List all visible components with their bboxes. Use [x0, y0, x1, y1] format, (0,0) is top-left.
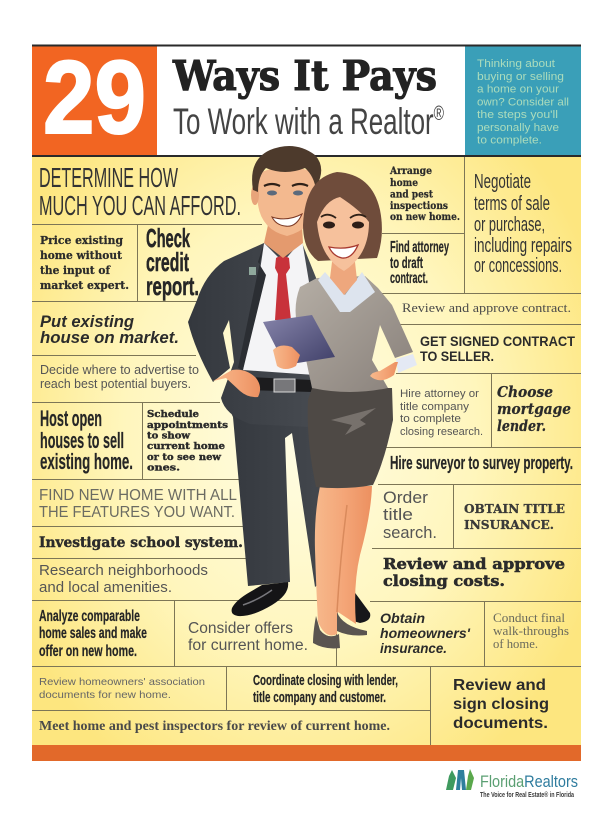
- step: negotiate terms: or concessions.: [474, 255, 562, 277]
- woman face: [317, 197, 369, 271]
- step: hire attorney or title company: title company: [400, 401, 470, 413]
- step: review closing costs: Review and approve: [383, 556, 565, 573]
- step: coordinate closing: title company and customer.: [253, 689, 386, 706]
- man hand: [213, 370, 260, 397]
- woman sleeve cuff: [396, 354, 417, 373]
- panel: teal intro: [465, 46, 581, 156]
- step: host open houses: Host open: [40, 406, 102, 431]
- step: find new home: THE FEATURES YOU WANT.: [39, 504, 235, 521]
- step: review and sign closing documents: documents.: [453, 715, 548, 732]
- tagline: The Voice for Real Estate® in Florida: [480, 791, 574, 799]
- step: check credit report: report.: [146, 271, 199, 301]
- step: schedule appointments: to show: [147, 430, 191, 442]
- step: consider offers: Consider offers: [188, 620, 293, 637]
- step: review homeowners association: Review homeowners' association: [39, 676, 205, 688]
- step: order title search: Order: [383, 488, 428, 507]
- step: find new home: [39, 487, 237, 521]
- panel: orange number block: [32, 40, 157, 156]
- step: schedule appointments: or to see new: [147, 452, 222, 463]
- man face: [256, 166, 318, 236]
- step: schedule appointments: appointments: [147, 420, 228, 431]
- step: decide where to advertise: reach best potential buyers.: [40, 376, 191, 391]
- step: host open houses: existing home.: [40, 449, 133, 474]
- step: find attorney: to draft: [390, 255, 423, 272]
- panel: teal intro: Thinking about: [477, 58, 555, 70]
- step: hire attorney or title company: to complete: [400, 413, 461, 425]
- step: price existing home: the input of: [40, 263, 111, 277]
- step: price existing home: home without: [40, 248, 123, 262]
- step: negotiate terms: Negotiate: [474, 171, 531, 193]
- step: negotiate terms: or purchase,: [474, 214, 545, 236]
- step: get signed contract: TO SELLER.: [420, 349, 494, 364]
- step: obtain homeowners insurance: insurance.: [380, 641, 447, 656]
- step: host open houses: [40, 406, 133, 474]
- title: To Work with a Realtor: [173, 101, 544, 142]
- step: research neighborhoods: and local amenities.: [39, 579, 172, 596]
- step: arrange inspections: inspections: [390, 200, 448, 212]
- man trousers: [224, 398, 355, 592]
- step: arrange inspections: and pest: [390, 188, 433, 200]
- step: price existing home: Price existing: [40, 233, 123, 247]
- step: review homeowners association: [39, 676, 205, 701]
- man lapel shading: [238, 243, 266, 370]
- step: hire attorney or title company: Hire attorney or: [400, 388, 479, 400]
- woman hand holding folder: [273, 346, 300, 369]
- woman rear shoe: [337, 612, 367, 636]
- step: find attorney: contract.: [390, 270, 428, 287]
- woman smile: [329, 245, 358, 258]
- woman shoes: [313, 616, 340, 648]
- step: find attorney: [390, 239, 449, 287]
- folder: [263, 315, 335, 365]
- step: investigate school system: Investigate school system.: [39, 535, 243, 551]
- step: choose mortgage lender: lender.: [497, 417, 546, 435]
- panel: teal intro: the steps you'll: [477, 109, 558, 121]
- step: decide where to advertise: Decide where to advertise to: [40, 362, 199, 377]
- woman neck: [330, 262, 357, 295]
- step: analyze comparable home sales: offer on new home.: [39, 643, 137, 660]
- step: get signed contract: [420, 334, 576, 364]
- step: arrange inspections: home: [390, 177, 418, 189]
- man smile: [272, 214, 302, 226]
- step: review closing costs: closing costs.: [383, 573, 505, 590]
- step: choose mortgage lender: mortgage: [497, 400, 571, 418]
- panel: yellow steps area: [32, 156, 581, 746]
- man ears: [251, 185, 259, 205]
- step: find attorney: Find attorney: [390, 239, 449, 256]
- footer orange bar: [32, 745, 581, 761]
- step: review closing costs: [383, 556, 565, 590]
- step: research neighborhoods: [39, 562, 208, 596]
- step: choose mortgage lender: [497, 383, 571, 435]
- woman jacket: [296, 276, 413, 392]
- illustration: realtor woman: [263, 172, 417, 648]
- step: review and approve contract: Review and approve contract.: [402, 300, 571, 315]
- step: review and sign closing documents: sign closing: [453, 696, 549, 713]
- step: review homeowners association: documents for new home.: [39, 689, 171, 701]
- woman legs: [315, 486, 372, 636]
- woman hand on hip: [370, 362, 398, 380]
- man shirt: [243, 240, 315, 375]
- step: arrange inspections: on new home.: [390, 211, 460, 223]
- step: analyze comparable home sales: home sales and make: [39, 625, 147, 642]
- step: arrange inspections: [389, 165, 460, 223]
- logo: Florida Realtors: [446, 769, 578, 799]
- step: put existing house on market: house on market.: [40, 329, 179, 347]
- man right shoe: [350, 590, 370, 623]
- header band: [32, 40, 581, 156]
- step: schedule appointments: ones.: [147, 462, 180, 474]
- step: determine how much: DETERMINE HOW: [39, 162, 178, 193]
- step: price existing home: [40, 233, 129, 292]
- step: obtain homeowners insurance: Obtain: [380, 611, 425, 626]
- step: conduct final walk-throughs: of home.: [493, 637, 538, 651]
- big number 29: 29: [43, 40, 146, 156]
- man tie: [275, 256, 291, 320]
- step: conduct final walk-throughs: Conduct final: [493, 611, 566, 625]
- title: Ways It Pays: [172, 52, 437, 100]
- step: put existing house on market: Put existing: [40, 313, 134, 331]
- panel: teal intro: personally have: [477, 122, 559, 134]
- step: check credit report: Check: [146, 223, 190, 253]
- step: obtain title insurance: INSURANCE.: [464, 517, 554, 532]
- step: coordinate closing: [253, 672, 398, 706]
- step: check credit report: [146, 223, 199, 301]
- step: put existing house on market: [40, 313, 179, 347]
- step: order title search: [383, 488, 437, 542]
- step: conduct final walk-throughs: [493, 611, 569, 651]
- step: analyze comparable home sales: [39, 608, 147, 660]
- step: analyze comparable home sales: Analyze comparable: [39, 608, 140, 625]
- icon: houses and people: [446, 769, 474, 790]
- step: negotiate terms: terms of sale: [474, 193, 550, 215]
- step: host open houses: houses to sell: [40, 428, 124, 453]
- step: schedule appointments: [147, 409, 228, 474]
- step: obtain title insurance: OBTAIN TITLE: [464, 501, 565, 516]
- title: [172, 52, 444, 142]
- shoe highlight: [243, 590, 272, 605]
- man eyes and brows: [264, 184, 308, 196]
- step: conduct final walk-throughs: walk-throughs: [493, 624, 569, 638]
- step: determine how much: MUCH YOU CAN AFFORD.: [39, 190, 241, 221]
- brand name: FloridaRealtors: [480, 772, 578, 791]
- step: decide where to advertise: [40, 362, 199, 391]
- illustration: realtor man: [188, 146, 370, 623]
- step: obtain homeowners insurance: [380, 611, 471, 656]
- man neck: [264, 225, 303, 258]
- step: determine how much: [39, 162, 241, 221]
- step: research neighborhoods: Research neighborhoods: [39, 562, 208, 579]
- step: hire attorney or title company: [400, 388, 483, 438]
- step: schedule appointments: current home: [147, 441, 225, 452]
- woman hair back: [303, 172, 382, 261]
- leg shading: [337, 505, 347, 612]
- step: get signed contract: GET SIGNED CONTRACT: [420, 334, 576, 349]
- step: arrange inspections: Arrange: [389, 165, 432, 177]
- step: meet inspectors: Meet home and pest inspectors for review of current home.: [39, 718, 390, 733]
- woman collar: [318, 272, 375, 312]
- woman eyes and brows: [321, 215, 366, 228]
- woman skirt: [308, 388, 393, 488]
- step: hire attorney or title company: closing research.: [400, 426, 483, 438]
- panel: teal intro: own? Consider all: [477, 96, 569, 108]
- skirt highlight: [331, 408, 376, 435]
- step: order title search: title: [383, 505, 413, 524]
- man belt: [248, 377, 312, 392]
- step: obtain title insurance: [464, 501, 565, 532]
- step: review and sign closing documents: [453, 677, 549, 732]
- belt buckle: [274, 379, 295, 392]
- step: choose mortgage lender: Choose: [497, 383, 553, 401]
- title: ®: [434, 103, 444, 125]
- man left shoe: [232, 582, 288, 616]
- step: find new home: FIND NEW HOME WITH ALL: [39, 487, 237, 504]
- step: consider offers: for current home.: [188, 637, 308, 654]
- step: coordinate closing: Coordinate closing with lender,: [253, 672, 398, 689]
- step: check credit report: credit: [146, 247, 189, 277]
- man hair: [252, 146, 321, 192]
- man lapel pin: [249, 267, 256, 275]
- step: review and sign closing documents: Review and: [453, 677, 546, 694]
- step: order title search: search.: [383, 523, 437, 542]
- step: schedule appointments: Schedule: [147, 409, 199, 420]
- step: obtain homeowners insurance: homeowners': [380, 626, 471, 641]
- step: negotiate terms: [474, 171, 572, 277]
- step: price existing home: market expert.: [40, 278, 129, 292]
- panel: teal intro: to complete.: [477, 134, 542, 146]
- man jacket: [188, 243, 325, 427]
- panel: teal intro: a home on your: [477, 84, 559, 96]
- panel: teal intro: buying or selling: [477, 71, 564, 83]
- step: consider offers: [188, 620, 308, 654]
